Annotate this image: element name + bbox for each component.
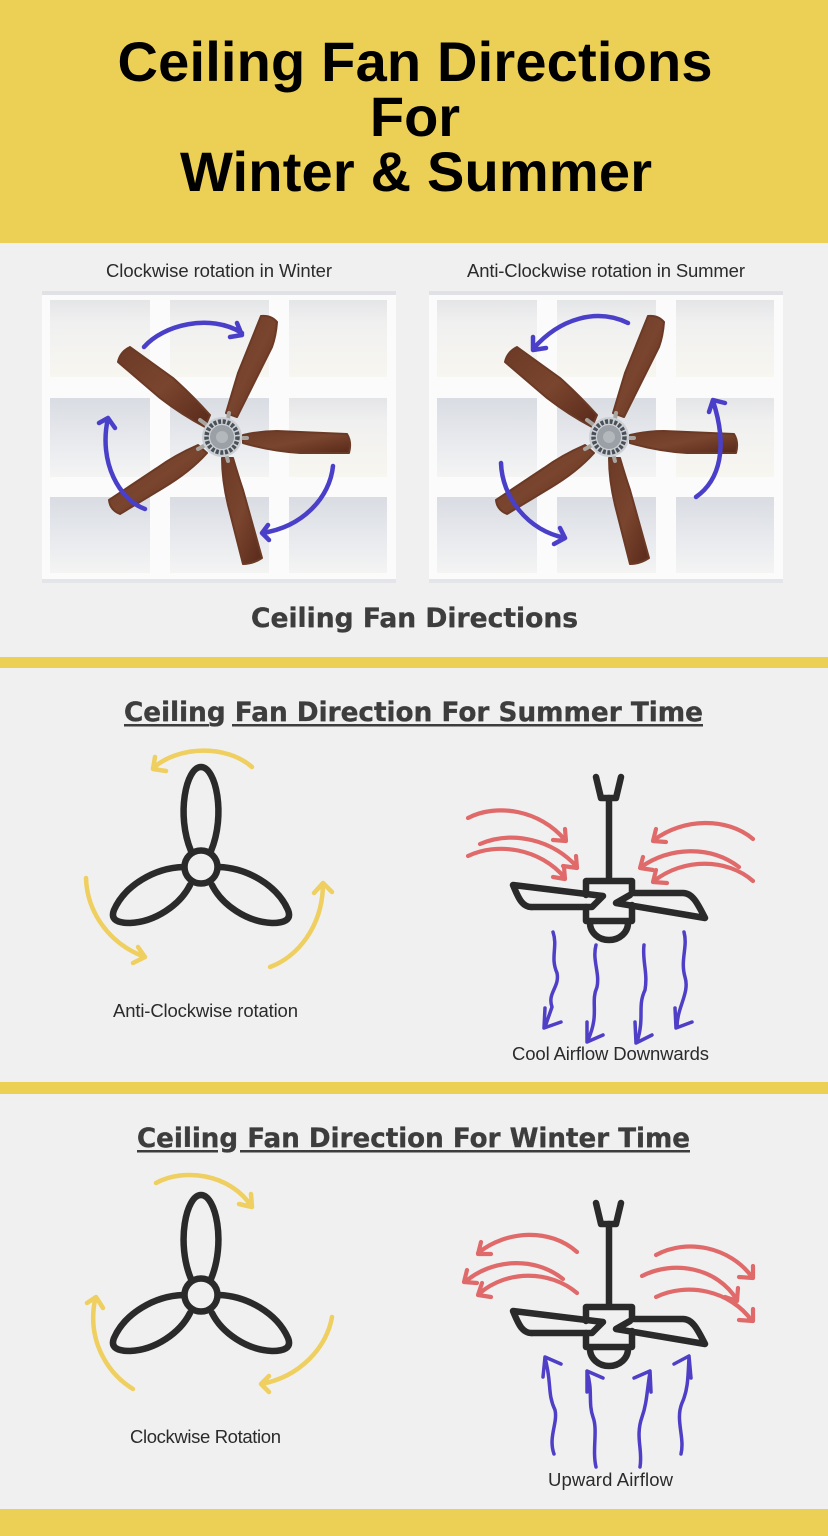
- divider band: [0, 1082, 828, 1094]
- title: Ceiling Fan Directions: [118, 30, 712, 93]
- icon: fan with anti-clockwise arrows: [86, 751, 332, 967]
- icon: side fan with upward airflow: [464, 1203, 753, 1467]
- label: cool airflow: Cool Airflow Downwards: [512, 1043, 709, 1064]
- label: clockwise rotation: Clockwise Rotation: [130, 1426, 281, 1447]
- icon: fan with clockwise arrows: [87, 1175, 332, 1392]
- heading: summer: Ceiling Fan Direction For Summer Time: [124, 697, 703, 728]
- panel: ceiling fan photos: [42, 260, 783, 634]
- caption: winter rotation: Clockwise rotation in Winter: [106, 260, 332, 281]
- title banner: [0, 0, 828, 243]
- panel: summer: [86, 697, 753, 1064]
- label: anti-clockwise rotation: Anti-Clockwise rotation: [113, 1000, 298, 1021]
- panel: winter: [87, 1123, 753, 1490]
- label: upward airflow: Upward Airflow: [548, 1469, 674, 1490]
- photo: fan clockwise: [42, 291, 396, 583]
- heading: winter: Ceiling Fan Direction For Winter Time: [137, 1123, 690, 1154]
- heading: ceiling fan directions: Ceiling Fan Directions: [251, 603, 578, 634]
- divider band: [0, 657, 828, 668]
- photo: fan anti-clockwise: [429, 291, 783, 583]
- title banner: Winter & Summer: [180, 140, 652, 203]
- footer band: [0, 1509, 828, 1536]
- icon: side fan with downward airflow: [468, 777, 753, 1043]
- caption: summer rotation: Anti-Clockwise rotation in Summer: [467, 260, 745, 281]
- title banner: For: [370, 85, 460, 148]
